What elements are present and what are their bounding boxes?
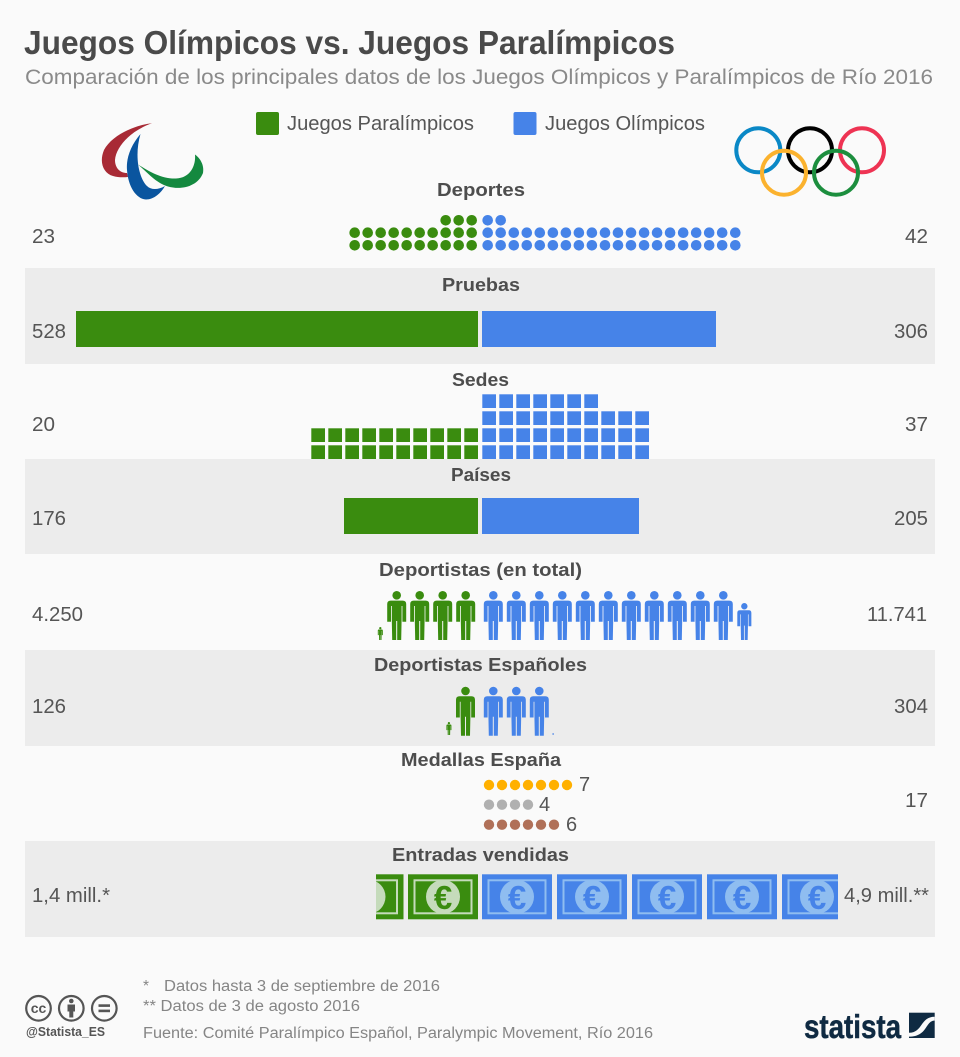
pictogram: Deportistas paralímpicos [378,591,475,640]
dots: Deportes paralímpicos [349,215,477,251]
dots: Deportes olímpicos [482,215,741,251]
subtitle: Comparación de los principales datos de los Juegos Olímpicos y Paralímpicos de Río 2016 [25,65,933,89]
legend [256,112,705,135]
value: Deportes olímpicos: 42 [905,226,928,248]
heading: Sedes: Sedes [452,370,509,390]
heading: Medallas España: Medallas España [401,750,562,770]
banknotes: Entradas paralímpicos: € [434,879,452,916]
footnotes: ** Datos de 3 de agosto 2016 [143,998,360,1015]
value: Pruebas olímpicas: 306 [894,321,928,343]
statista logo: statista [804,1008,902,1045]
value: Deportistas olímpicos: 11.741 [867,604,927,626]
bar: Países paralímpicos [344,498,478,534]
value: Entradas paralímpicos: 1,4 mill.* [32,885,110,907]
medals: plata [484,800,533,810]
pictogram: Españoles olímpicos [484,687,554,736]
icon: creative commons licence [26,996,117,1021]
handle: @Statista_ES [26,1025,105,1039]
banknotes: Entradas olímpicos: € [658,879,676,916]
value: Medallas total: 17 [905,790,928,812]
banknotes: Entradas olímpicos: € [583,879,601,916]
banknotes: Entradas olímpicos: € [733,879,751,916]
footnotes: * [143,978,149,995]
value: Sedes olímpicas: 37 [905,414,928,436]
banknotes: Entradas olímpicos [482,874,852,919]
icon: paralympic agitos [102,123,203,200]
bar: Países olímpicos [482,498,639,534]
heading: Pruebas: Pruebas [442,275,520,295]
bar: Pruebas olímpicas [482,311,716,347]
medals: bronce [484,820,559,830]
heading: Entradas vendidas: Entradas vendidas [392,845,569,865]
title: Juegos Olímpicos vs. Juegos Paralímpicos [24,24,675,61]
band: Países [25,459,935,554]
legend: Juegos Paralímpicos [287,112,474,135]
pictogram: Deportistas olímpicos [484,591,751,640]
squares: Sedes olímpicas [482,394,649,459]
icon: creative commons licence: cc [31,1000,46,1016]
value: plata: 4 [539,794,550,816]
value: Españoles olímpicos: 304 [894,696,928,718]
source: Fuente: Comité Paralímpico Español, Paralympic Movement, Río 2016 [143,1025,653,1042]
icon: olympic rings [736,128,884,195]
value: Países paralímpicos: 176 [32,508,66,530]
value: oro: 7 [579,774,590,796]
value: Países olímpicos: 205 [894,508,928,530]
band: Pruebas [25,268,935,364]
banknotes: Entradas paralímpicos [376,874,478,920]
value: Entradas olímpicos: 4,9 mill.** [844,885,929,907]
band: Entradas vendidas [25,841,935,937]
value: Españoles paralímpicos: 126 [32,696,66,718]
heading: Deportistas Españoles: Deportistas Españoles [374,655,587,675]
legend: Juegos Olímpicos [545,112,705,135]
heading: Deportistas (en total): Deportistas (en total) [379,560,582,580]
value: Deportistas paralímpicos: 4.250 [32,604,83,626]
value: bronce: 6 [566,814,577,836]
squares: Sedes paralímpicas [311,428,478,459]
heading: Países: Países [451,465,511,485]
value: Sedes paralímpicas: 20 [32,414,55,436]
band: Deportistas Españoles [25,650,935,746]
value: Pruebas paralímpicas: 528 [32,321,66,343]
value: Deportes paralímpicos: 23 [32,226,55,248]
pictogram: Españoles paralímpicos [446,687,475,736]
medals: oro [484,780,572,790]
banknotes: Entradas olímpicos: € [508,879,526,916]
footnotes [143,978,440,1015]
bar: Pruebas paralímpicas [76,311,478,347]
heading: Deportes: Deportes [437,180,525,200]
banknotes: Entradas olímpicos: € [808,879,826,916]
footnotes: Datos hasta 3 de septiembre de 2016 [164,978,440,995]
